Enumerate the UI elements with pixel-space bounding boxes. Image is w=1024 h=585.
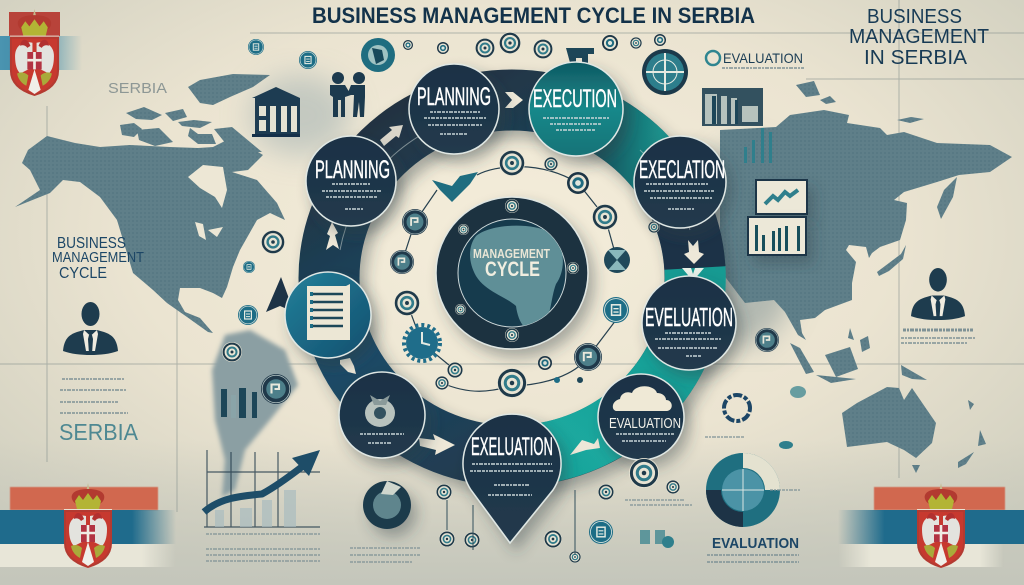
- icon: photo panel top right: [702, 88, 763, 126]
- icons: small artefacts lower right: [640, 386, 806, 548]
- map: South America: [212, 330, 298, 497]
- step: execution: EXECUTION: [533, 85, 617, 113]
- icons: inner chain medallions: [390, 150, 660, 398]
- flag: top left: [0, 9, 82, 96]
- step: evaluation cloud: EVALUATION: [609, 415, 681, 432]
- center: management cycle: [436, 197, 588, 349]
- step: planning top: PLANNING: [417, 83, 491, 111]
- step: evaluation cloud: [598, 374, 684, 460]
- caption: person left: [60, 379, 128, 413]
- step: exeluation pin: [463, 414, 561, 543]
- map: Australia: [842, 387, 986, 473]
- icon: money bag: [365, 395, 395, 427]
- label: business management cycle: MANAGEMENT: [52, 249, 144, 266]
- icons: lower medallions: [222, 39, 779, 563]
- icon: small bar chart: [744, 128, 772, 163]
- step: planning left: [306, 136, 396, 226]
- label: evaluation top: [706, 50, 804, 68]
- icon: crosshair: [642, 49, 688, 95]
- label: evaluation bottom: [707, 535, 799, 562]
- step: document icon circle: [285, 272, 371, 358]
- step: evaluation right: EVELUATION: [645, 302, 733, 332]
- icon: gear clock: [404, 325, 440, 361]
- label: business management cycle: BUSINESS: [57, 235, 126, 252]
- ring: cycle band: [329, 100, 695, 456]
- icon: framed chart 1: [756, 180, 807, 214]
- ring: dark right arc: [678, 203, 695, 268]
- connector lines: inner chain: [402, 167, 617, 391]
- step: planning top: [409, 64, 499, 154]
- map: Asia: [720, 81, 1012, 383]
- step: execution: [529, 62, 623, 156]
- inner ring outline: [340, 115, 690, 250]
- label: business management cycle: CYCLE: [59, 265, 107, 282]
- label: SERBIA top: SERBIA: [108, 80, 167, 97]
- icon row: top medallions: [299, 32, 666, 70]
- step: planning left: PLANNING: [315, 156, 390, 184]
- arrows on ring: [326, 92, 704, 455]
- icon: cloud: [613, 386, 672, 411]
- ring: teal upper arc: [545, 103, 678, 203]
- chart: growth arrow: [204, 450, 320, 561]
- icon: person right: [911, 268, 965, 320]
- icon: shield pie dark: [363, 481, 411, 529]
- label: evaluation top: EVALUATION: [723, 50, 803, 66]
- map: North America: [15, 74, 285, 333]
- step: execlation: EXECLATION: [639, 156, 725, 184]
- icon: evaluation target: [706, 453, 780, 527]
- arrow: teal chevron: [682, 268, 704, 281]
- center: management cycle: CYCLE: [485, 258, 540, 281]
- icon: handshake people: [330, 72, 365, 117]
- title: BUSINESS MANAGEMENT CYCLE IN SERBIA: [312, 3, 755, 28]
- heading: top right: [849, 6, 989, 69]
- step: evaluation right: [642, 276, 736, 370]
- heading: top right: IN SERBIA: [864, 47, 968, 69]
- icon: bank building: [252, 87, 300, 137]
- ring: teal lower arc: [528, 268, 695, 455]
- icon: document: [307, 284, 350, 340]
- label: SERBIA lower: SERBIA: [59, 419, 139, 445]
- icon: broken ring: [724, 395, 750, 421]
- micro text blocks: [350, 437, 800, 562]
- step: money icon circle: [339, 372, 425, 458]
- flag: bottom left: [0, 483, 176, 568]
- arrow: dark triangle: [266, 277, 294, 312]
- center: medallions: [455, 199, 579, 342]
- step: execlation: [634, 136, 726, 228]
- center: management cycle: MANAGEMENT: [473, 246, 550, 261]
- label: business management cycle: [52, 235, 144, 282]
- icon: teal bird: [432, 172, 478, 202]
- icon: skyline bars: [221, 388, 257, 418]
- flag: bottom right: [838, 483, 1024, 568]
- label: evaluation bottom: EVALUATION: [712, 535, 799, 552]
- grey wash behind right map: [250, 75, 800, 345]
- icon: person left: [63, 302, 118, 355]
- icon: globe top: [361, 38, 395, 72]
- caption: person right: [901, 330, 975, 343]
- icon: framed bar chart 2: [748, 217, 806, 255]
- heading: top right: MANAGEMENT: [849, 26, 989, 48]
- step: exeluation pin: EXELUATION: [471, 433, 553, 461]
- icon: teal pie: [604, 247, 630, 273]
- heading: top right: BUSINESS: [867, 6, 962, 28]
